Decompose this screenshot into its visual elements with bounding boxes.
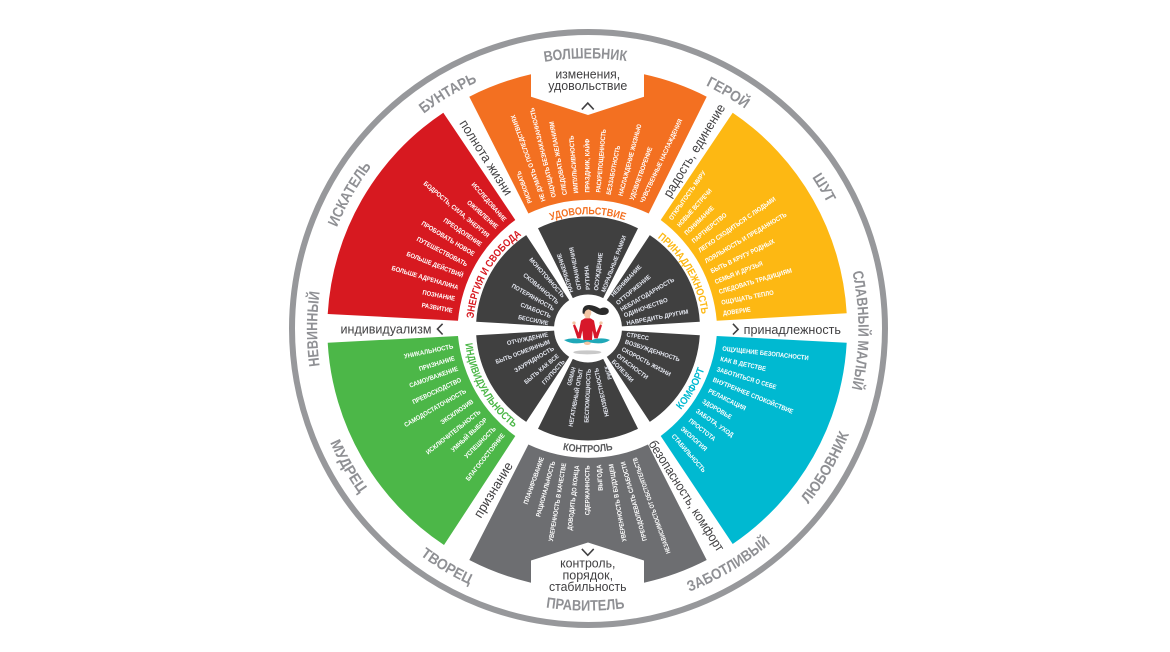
list: red: ПРЕОДОЛЕНИЕ xyxy=(442,217,483,249)
wedge: lower left: БЫТЬ ОСМЕЯННЫМ xyxy=(495,339,551,366)
label: контроль, порядок, стабильность: порядок, xyxy=(562,568,613,583)
panel: red sector (энергия и свобода) xyxy=(328,113,515,321)
list: cyan: ВНУТРЕННЕЕ СПОКОЙСТВИЕ xyxy=(711,375,795,416)
wedge: bottom: БЕСПОМОЩНОСТЬ xyxy=(583,368,593,423)
list: gray: ВЫГОДА xyxy=(596,464,605,491)
outer ring xyxy=(292,32,885,625)
list: gray: ПРЕОДОЛЕВАТЬ СЛАБОСТИ xyxy=(620,460,649,542)
head xyxy=(583,308,591,317)
list: yellow: СЛЕДОВАТЬ ТРАДИЦИЯМ xyxy=(718,268,793,296)
list: gray: ПЛАНИРОВАНИЕ xyxy=(523,456,546,505)
label: принадлежность: принадлежность xyxy=(744,322,841,337)
wedge: lower right: БОЛЕЗНИ xyxy=(610,359,635,384)
name: славный малый: СЛАВНЫЙ МАЛЫЙ xyxy=(852,271,872,390)
panel: gray sector (контроль) xyxy=(469,444,707,583)
list: green: БЛАГОСОСТОЯНИЕ xyxy=(465,432,507,483)
list: orange: ОЩУЩАТЬ БЕЗНАКАЗАННОСТЬ xyxy=(529,107,558,198)
wedge: top: МОРАЛЬНЫЕ РАМКИ xyxy=(600,235,628,293)
list: cyan: ОЩУЩЕНИЕ БЕЗОПАСНОСТИ xyxy=(722,346,809,362)
wedge: top: ОГРАНИЧЕНИЯ xyxy=(569,246,583,290)
list: green: УМНЫЙ ВЫБОР xyxy=(449,415,489,454)
name: волшебник: ВОЛШЕБНИК xyxy=(544,48,628,62)
list: orange: ПРАЗДНИК, КАЙФ xyxy=(582,138,591,192)
list: green xyxy=(403,343,507,483)
list: orange: РАСКРЕПОЩЕННОСТЬ xyxy=(595,129,608,193)
list: red: ИССЛЕДОВАНИЕ xyxy=(470,181,508,224)
list: gray: ДОВОДИТЬ ДО КОНЦА xyxy=(567,465,581,531)
wedge: lower right xyxy=(607,331,700,422)
wedge: upper left: СЛАБОСТЬ xyxy=(519,302,552,320)
wedge: upper right: ОТТОРЖЕНИЕ xyxy=(615,274,653,307)
name: шут: ШУТ xyxy=(812,172,836,200)
legs xyxy=(564,338,610,343)
wedge: lower right: СКОРОСТЬ ЖИЗНИ xyxy=(620,346,672,378)
list: green: ЭКСКЛЮЗИВ xyxy=(439,398,475,426)
sector shape xyxy=(661,113,847,321)
list: orange: БЕЗЗАБОТНОСТЬ xyxy=(606,145,622,196)
wedge: upper right: НАВРЕДИТЬ ДРУГИМ xyxy=(626,308,689,327)
wedge: bottom: ОБМАН xyxy=(566,366,578,386)
list: red: РАЗВИТИЕ xyxy=(421,302,454,315)
list: orange: СЛЕДОВАТЬ ЖЕЛАНИЯМ xyxy=(549,121,569,195)
list: orange: ИМПУЛЬСИВНОСТЬ xyxy=(568,135,580,194)
wedge: bottom: НЕИЗВЕСТНОСТЬ xyxy=(593,367,611,417)
inner dark wheel xyxy=(476,217,700,440)
label: изменения, удовольствие xyxy=(548,66,627,93)
name: заботливый: ЗАБОТЛИВЫЙ xyxy=(687,534,770,591)
list: green: ИСКЛЮЧИТЕЛЬНОСТЬ xyxy=(425,409,483,456)
list: yellow: НОВЫЕ ВСТРЕЧИ xyxy=(676,188,714,229)
feet xyxy=(584,342,591,345)
sector shape xyxy=(328,336,515,545)
list: red: ОЖИВЛЕНИЕ xyxy=(465,199,500,231)
list: red: БОДРОСТЬ, СИЛА, ЭНЕРГИЯ xyxy=(422,180,491,240)
list: green: ПРИЗНАНИЕ xyxy=(418,355,456,373)
wedge: upper left: МОНОТОННОСТЬ xyxy=(527,257,566,300)
arrow: right xyxy=(733,324,738,335)
list: yellow: БЫТЬ В КРУГУ РОДНЫХ xyxy=(710,238,777,275)
name: творец: ТВОРЕЦ xyxy=(422,547,472,588)
wedge: bottom xyxy=(538,359,638,440)
wedge: lower right: ОПАСНОСТИ xyxy=(615,353,649,381)
hands xyxy=(572,321,603,325)
heading: индивидуальность: ИНДИВИДУАЛЬНОСТЬ xyxy=(465,343,516,427)
list: orange: РИСКОВАТЬ xyxy=(516,170,534,204)
wedge: lower left: ОТЧУЖДЕНИЕ xyxy=(506,332,549,347)
list: cyan: СТАБИЛЬНОСТЬ xyxy=(670,433,707,474)
list: cyan: ЗАБОТА, УХОД xyxy=(694,408,735,439)
wedge: upper right: НЕВНИМАНИЕ xyxy=(610,264,643,299)
panel: cyan sector (комфорт) xyxy=(661,336,847,544)
heading: энергия и свобода: ЭНЕРГИЯ И СВОБОДА xyxy=(466,230,522,318)
sector shape xyxy=(469,74,707,214)
axis labels xyxy=(341,66,841,594)
list: orange xyxy=(510,107,684,204)
label: признание: признание xyxy=(471,459,516,520)
label: изменения, удовольствие: изменения, xyxy=(555,66,620,81)
list: green: САМОУВАЖЕНИЕ xyxy=(409,365,460,390)
wedge: upper left: ПОТЕРЯННОСТЬ xyxy=(510,283,556,313)
list: cyan: ЭКОЛОГИЯ xyxy=(679,426,708,453)
name: правитель: ПРАВИТЕЛЬ xyxy=(546,597,624,611)
label: контроль, порядок, стабильность: контроль, xyxy=(560,556,615,571)
label: полнота жизни: полнота жизни xyxy=(456,117,516,198)
arrow: left xyxy=(437,324,443,335)
sector shape xyxy=(661,336,847,544)
wedge: top: НАПРЯЖЕНИЕ xyxy=(556,252,575,293)
panel: orange sector (удовольствие) xyxy=(469,74,707,214)
top with arms xyxy=(573,318,602,340)
icon: meditating woman xyxy=(564,305,610,354)
panel: green sector (индивидуальность) xyxy=(328,336,515,545)
heading: контроль: КОНТРОЛЬ xyxy=(563,442,612,452)
list: red xyxy=(391,180,508,315)
label: контроль, порядок, стабильность: стабильность xyxy=(549,579,627,594)
name: искатель: ИСКАТЕЛЬ xyxy=(328,164,370,227)
list: cyan: КАК В ДЕТСТВЕ xyxy=(720,356,767,373)
list: cyan: РЕЛАКСАЦИЯ xyxy=(707,388,747,413)
section headings xyxy=(465,206,708,452)
list: cyan xyxy=(670,346,809,474)
list: yellow: ОТКРЫТОСТЬ МИРУ xyxy=(668,169,708,222)
list: yellow: ПАРТНЕРСТВО xyxy=(691,212,728,245)
panel: yellow sector (принадлежность) xyxy=(661,113,847,321)
wedge: lower left xyxy=(476,331,569,422)
list: gray xyxy=(523,456,673,554)
list: gray: УВЕРЕННОСТЬ В БУДУЩЕМ xyxy=(608,463,628,542)
wedge: top xyxy=(538,217,638,298)
name: любовник: ЛЮБОВНИК xyxy=(802,430,849,504)
wedge: lower right: ВОЗБУЖДЕННОСТЬ xyxy=(624,339,681,364)
list: orange: НЕ ДУМАТЬ О ПОСЛЕДСТВИЯХ xyxy=(510,113,548,202)
arrow: up xyxy=(582,103,594,109)
label: радость, единение: радость, единение xyxy=(660,101,728,200)
list: green: САМОДОСТАТОЧНОСТЬ xyxy=(403,388,468,429)
list: gray: РАЦИОНАЛЬНОСТЬ xyxy=(535,460,557,518)
list: yellow: ЛЕГКО СХОДИТЬСЯ С ЛЮДЬМИ xyxy=(697,196,778,254)
wedge: lower left: ГЛУПОСТЬ xyxy=(541,358,567,386)
wedge: bottom: РИСК xyxy=(603,365,614,380)
list: red: ПРОБОВАТЬ НОВОЕ xyxy=(420,220,476,258)
heading: удовольствие: УДОВОЛЬСТВИЕ xyxy=(548,206,626,221)
archetype names xyxy=(305,48,872,611)
label: контроль, порядок, стабильность xyxy=(549,556,627,594)
wedge: top: РУТИНА xyxy=(583,265,592,290)
wedge: upper left xyxy=(476,235,569,327)
wedge: bottom: НЕГАТИВНЫЙ ОПЫТ xyxy=(567,368,585,427)
list: green: УСПЕШНОСТЬ xyxy=(463,426,498,460)
name: невинный: НЕВИННЫЙ xyxy=(305,292,320,366)
neck xyxy=(585,315,590,319)
wedge: lower right: СТРЕСС xyxy=(626,331,650,342)
sector shape xyxy=(328,113,515,321)
list: red: ПОЗНАНИЕ xyxy=(422,290,456,303)
list: gray: УВЕРЕННОСТЬ В КАЧЕСТВЕ xyxy=(548,462,568,542)
label: изменения, удовольствие: удовольствие xyxy=(548,78,627,93)
name: мудрец: МУДРЕЦ xyxy=(330,439,367,496)
wedge: upper left: СКОВАННОСТЬ xyxy=(521,272,560,306)
list: cyan: ЗДОРОВЬЕ xyxy=(701,398,733,421)
wedge: lower left: БЫТЬ КАК ВСЕ xyxy=(523,353,561,386)
list: orange: НАСЛАЖДЕНИЕ ЖИЗНЬЮ xyxy=(618,123,644,197)
heading: принадлежность: ПРИНАДЛЕЖНОСТЬ xyxy=(658,232,708,314)
list: green: УНИКАЛЬНОСТЬ xyxy=(404,343,454,360)
list: yellow: ДОВЕРИЕ xyxy=(723,306,752,317)
wedge: top: ОСУЖДЕНИЕ xyxy=(593,252,605,291)
list: red: БОЛЬШЕ АДРЕНАЛИНА xyxy=(391,265,459,292)
wedge: upper right xyxy=(607,235,700,327)
list: cyan: ПРОСТОТА xyxy=(687,418,717,443)
hair xyxy=(583,305,609,315)
wedge: upper right: НЕБЛАГОДАРНОСТЬ xyxy=(619,276,676,313)
wedge: upper right: ОДИНОЧЕСТВО xyxy=(623,297,669,319)
list: green: ПРЕВОСХОДСТВО xyxy=(411,377,463,406)
list: orange: УДОВЛЕТВОРЕНИЕ xyxy=(629,146,655,201)
name: бунтарь: БУНТАРЬ xyxy=(418,76,476,114)
label: индивидуализм: индивидуализм xyxy=(341,321,432,336)
list: yellow: ЛОЯЛЬНОСТЬ И ПРЕДАННОСТЬ xyxy=(704,211,788,265)
list: yellow: СЕМЬЯ И ДРУЗЬЯ xyxy=(714,260,764,286)
name: герой: ГЕРОЙ xyxy=(706,76,751,108)
list: yellow: ПОНИМАНИЕ xyxy=(683,205,716,237)
heading: комфорт: КОМФОРТ xyxy=(676,366,704,410)
list: yellow: ОЩУЩАТЬ ТЕПЛО xyxy=(721,290,774,307)
list: red: БОЛЬШЕ ДЕЙСТВИЙ xyxy=(405,249,465,280)
label: безопасность, комфорт: безопасность, комфорт xyxy=(646,437,727,554)
list: cyan: ЗАБОТИТЬСЯ О СЕБЕ xyxy=(716,366,778,391)
wedge: upper left: БЕССИЛИЕ xyxy=(517,314,549,327)
arrow: down xyxy=(582,549,594,555)
list: orange: ЧУВСТВЕННЫЕ НАСЛАЖДЕНИЯ xyxy=(639,118,684,204)
list: red: ПУТЕШЕСТВОВАТЬ xyxy=(415,236,469,268)
list: gray: СДЕРЖАННОСТЬ xyxy=(584,465,591,515)
list: gray: НЕЗАВИСИМОСТЬ ОТ ОБСТОЯТЕЛЬСТВ xyxy=(632,456,673,554)
shadow xyxy=(573,350,601,354)
list: yellow xyxy=(668,169,793,317)
sector shape xyxy=(469,444,707,583)
wedge: lower left: ЗАУРЯДНОСТЬ xyxy=(513,345,556,374)
